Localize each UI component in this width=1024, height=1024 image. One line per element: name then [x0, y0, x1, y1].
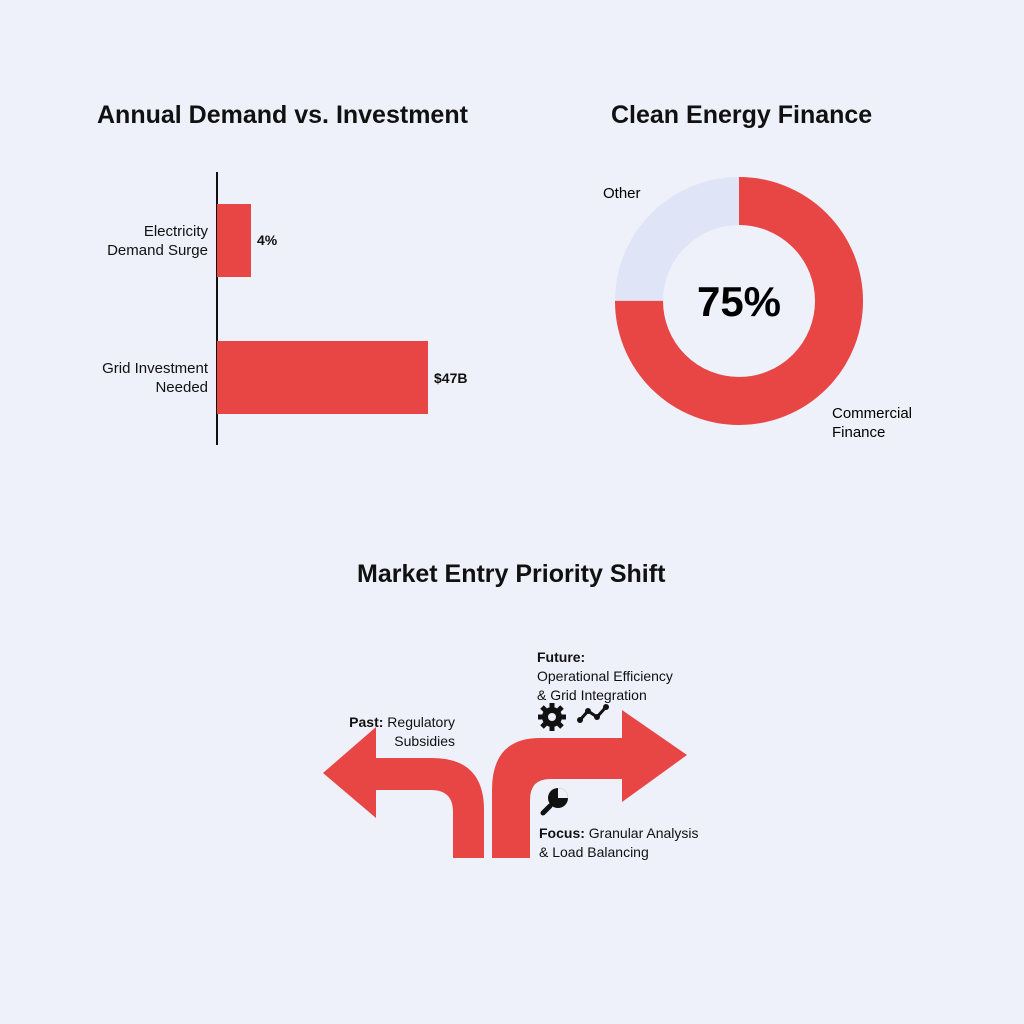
- value: 4%: 4%: [257, 232, 277, 248]
- icon: gear: [538, 703, 566, 731]
- arrows diagram: [323, 703, 687, 858]
- donut chart: Commercial: [832, 405, 912, 422]
- donut chart: Finance: [832, 424, 885, 441]
- icon: magnifier pie: [543, 788, 568, 813]
- text: past: Subsidies: [394, 733, 455, 749]
- text: past: Past: Regulatory: [349, 714, 455, 730]
- text: future: & Grid Integration: [537, 687, 647, 703]
- label: grid investment: [102, 360, 208, 396]
- label: grid investment: Needed: [155, 379, 208, 396]
- donut chart: 75%: [697, 278, 781, 325]
- label: grid investment: Grid Investment: [102, 360, 208, 377]
- text: future: Operational Efficiency: [537, 668, 673, 684]
- text: future: [537, 649, 673, 703]
- left arrow: [323, 727, 484, 858]
- text: focus: & Load Balancing: [539, 844, 649, 860]
- donut chart: Other: [603, 185, 641, 202]
- text: future: Future:: [537, 649, 585, 665]
- text: focus: Focus: Granular Analysis: [539, 825, 698, 841]
- donut chart: [603, 177, 912, 441]
- label: electricity demand: Demand Surge: [107, 242, 208, 259]
- title: priority shift: Market Entry Priority Shift: [357, 560, 665, 588]
- text: focus: [539, 825, 698, 860]
- bar: grid: [217, 341, 428, 414]
- text: past: [349, 714, 455, 749]
- right arrow: [492, 710, 687, 858]
- title: donut: Clean Energy Finance: [611, 101, 872, 129]
- label: electricity demand: [107, 223, 208, 259]
- title: bar chart: Annual Demand vs. Investment: [97, 101, 468, 129]
- axis: [216, 172, 218, 445]
- value: $47B: $47B: [434, 370, 467, 386]
- label: electricity demand: Electricity: [144, 223, 208, 240]
- bar: electricity: [217, 204, 251, 277]
- bar chart: [102, 172, 467, 445]
- icon: trend line: [577, 704, 609, 723]
